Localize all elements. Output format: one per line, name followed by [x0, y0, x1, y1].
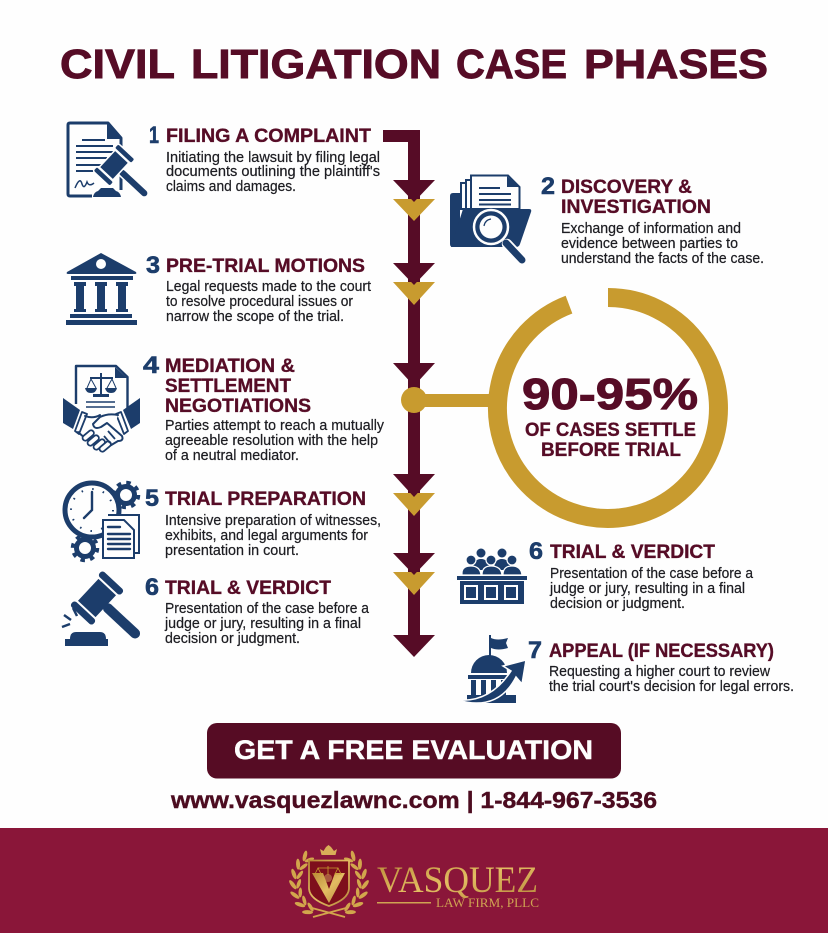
description: judge or jury, resulting in a final: [164, 616, 361, 632]
description: Initiating the lawsuit by filing legal: [166, 150, 380, 166]
logo emblem: [288, 845, 370, 919]
icon: jury box: [457, 548, 527, 604]
description: documents outlining the plaintiff's: [166, 164, 380, 180]
step number 7: 7: [528, 637, 542, 664]
callout: 90-95% of cases settle: 90-95%: [522, 370, 698, 419]
description: to resolve procedural issues or: [166, 294, 353, 310]
description: judge or jury, resulting in a final: [549, 581, 745, 597]
description: exhibits, and legal arguments for: [165, 528, 368, 544]
description: Parties attempt to reach a mutually: [165, 418, 385, 434]
icon: document and gavel: [68, 123, 160, 210]
icon: capitol with rising arrow: [457, 635, 526, 703]
description: Requesting a higher court to review: [549, 664, 771, 680]
description: [164, 601, 370, 647]
heading: DISCOVERY &: [561, 176, 692, 198]
description: [165, 418, 385, 464]
logo subtitle: LAW FIRM, PLLC: [436, 896, 539, 910]
footer band: [0, 828, 828, 933]
description: Presentation of the case before a: [165, 601, 370, 617]
heading: MEDIATION &: [165, 355, 295, 377]
heading: PRE-TRIAL MOTIONS: [166, 255, 365, 277]
heading: NEGOTIATIONS: [165, 395, 311, 417]
panel: step 6 trial and verdict (left): [62, 570, 370, 654]
step number 2: 2: [541, 173, 555, 200]
description: understand the facts of the case.: [561, 251, 764, 267]
call to action button: GET A FREE EVALUATION: [234, 735, 593, 765]
description: agreeable resolution with the help: [165, 433, 378, 449]
title: CASE: [456, 41, 567, 87]
title: [60, 41, 768, 87]
description: [561, 221, 764, 267]
panel: step 6 trial and verdict (right): [457, 538, 754, 612]
icon: scales document and handshake: [63, 366, 140, 453]
step number 3: 3: [146, 252, 160, 279]
description: [166, 150, 380, 195]
heading: FILING A COMPLAINT: [166, 125, 371, 147]
timeline arrow spine: [383, 130, 435, 657]
callout: 90-95% of cases settle: BEFORE TRIAL: [541, 439, 681, 461]
heading: [165, 355, 311, 417]
title: PHASES: [584, 41, 768, 87]
icon: courthouse: [66, 253, 137, 325]
settlement callout connector: [401, 387, 492, 413]
panel: step 4 mediation: [63, 352, 385, 464]
heading: [561, 176, 711, 218]
description: Legal requests made to the court: [166, 279, 371, 295]
description: decision or judgment.: [165, 631, 300, 647]
description: Intensive preparation of witnesses,: [165, 513, 381, 529]
logo rule: [377, 902, 431, 904]
description: narrow the scope of the trial.: [166, 309, 344, 325]
step number 4: 4: [143, 352, 160, 379]
description: [549, 566, 754, 612]
panel: step 3 pre-trial motions: [66, 252, 371, 325]
panel: step 1 filing a complaint: [68, 122, 380, 210]
icon: folder and magnifier: [450, 176, 531, 260]
panel: step 5 trial preparation: [65, 482, 381, 560]
step number 6: 6: [145, 574, 159, 601]
description: [166, 279, 371, 325]
icon: gavel: [62, 570, 155, 654]
heading: INVESTIGATION: [561, 196, 711, 218]
logo wordmark: VASQUEZ: [377, 860, 538, 901]
callout: 90-95% of cases settle: OF CASES SETTLE: [525, 419, 696, 441]
description: claims and damages.: [166, 179, 296, 195]
description: Presentation of the case before a: [550, 566, 754, 582]
description: evidence between parties to: [561, 236, 738, 252]
description: presentation in court.: [165, 543, 299, 559]
description: Exchange of information and: [561, 221, 741, 237]
step number 6: 6: [529, 538, 543, 565]
title: CIVIL: [60, 41, 175, 87]
contact line: www.vasquezlawnc.com | 1-844-967-3536: [170, 787, 657, 813]
description: [165, 513, 381, 559]
heading: TRIAL & VERDICT: [550, 541, 715, 563]
call to action button: [207, 723, 621, 778]
heading: TRIAL PREPARATION: [165, 488, 366, 510]
title: LITIGATION: [191, 41, 441, 87]
step number 5: 5: [145, 485, 159, 512]
callout: 90-95% of cases settle: [497, 298, 718, 518]
panel: step 7 appeal: [457, 635, 794, 703]
description: of a neutral mediator.: [165, 448, 299, 464]
description: the trial court's decision for legal errors.: [549, 679, 794, 695]
heading: SETTLEMENT: [165, 375, 291, 397]
heading: APPEAL (IF NECESSARY): [549, 640, 774, 662]
step number 1: 1: [149, 122, 159, 149]
logo: Vasquez Law Firm: [288, 845, 539, 919]
icon: clock gears documents: [65, 482, 139, 560]
description: decision or judgment.: [550, 596, 685, 612]
description: [549, 664, 794, 695]
heading: TRIAL & VERDICT: [165, 577, 331, 599]
panel: step 2 discovery: [450, 173, 764, 267]
